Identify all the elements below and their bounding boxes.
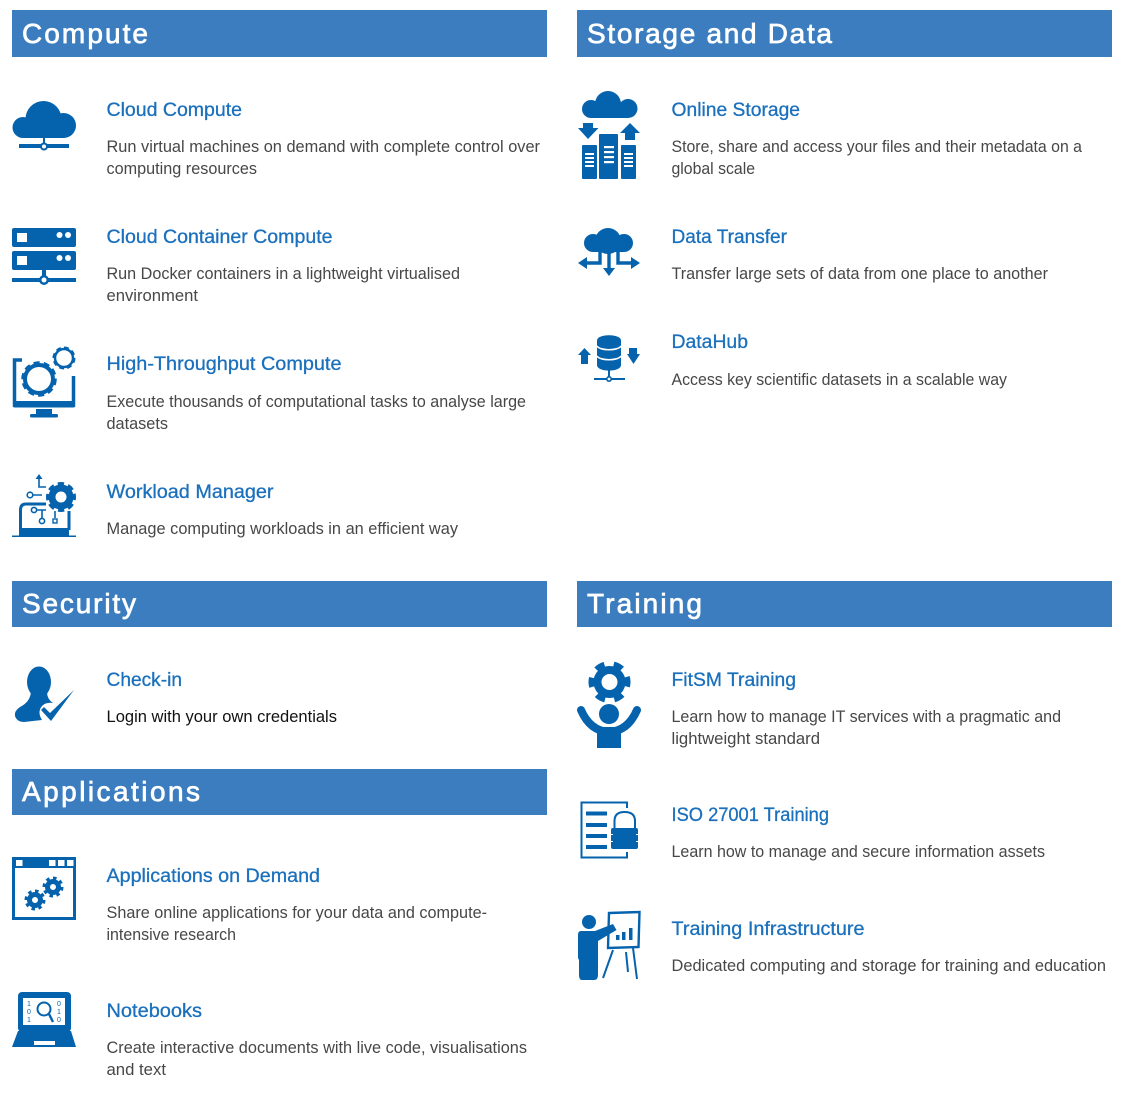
icon: document with padlock [582, 802, 638, 858]
description: Login with your own credentials [106, 708, 337, 726]
description [106, 265, 460, 305]
heading: applications [12, 769, 547, 815]
heading: storage and data: Storage and Data [587, 18, 832, 49]
description: Share online applications for your data and compute- [106, 904, 487, 922]
icon: laptop with magnifier and binary: 1 [27, 1017, 31, 1024]
heading: training: Training [587, 588, 702, 619]
title: Online Storage [672, 99, 800, 121]
description [672, 708, 1061, 748]
description: Create interactive documents with live code, visualisations [106, 1039, 527, 1057]
title: ISO 27001 Training [672, 804, 829, 826]
item: iso 27001 training [582, 802, 1045, 861]
item: datahub [578, 331, 1008, 389]
icon: person raising gear [581, 660, 637, 748]
item: cloud container compute [12, 226, 460, 305]
title: Workload Manager [106, 481, 274, 503]
title: FitSM Training [672, 669, 796, 691]
heading: compute: Compute [22, 18, 148, 49]
description: Execute thousands of computational tasks to analyse large [106, 393, 526, 411]
icon: database with arrows [578, 335, 640, 382]
title: Applications on Demand [106, 865, 320, 887]
heading: applications: Applications [22, 776, 200, 807]
icon: cloud with network [12, 101, 76, 150]
description: Run virtual machines on demand with complete control over [106, 138, 540, 156]
title: Check-in [106, 669, 182, 691]
title: Notebooks [106, 1000, 202, 1022]
item: online storage [578, 91, 1083, 179]
item: fitsm training [581, 660, 1061, 748]
description: datasets [106, 415, 168, 433]
description: lightweight standard [672, 730, 820, 748]
description: environment [106, 287, 198, 305]
description: Run Docker containers in a lightweight virtualised [106, 265, 460, 283]
description [106, 1039, 527, 1079]
item: high-throughput compute [13, 348, 526, 433]
title: High-Throughput Compute [106, 353, 342, 375]
item: cloud compute [12, 99, 540, 178]
description: Learn how to manage and secure information assets [672, 843, 1045, 861]
description: global scale [672, 160, 755, 178]
icon: laptop with magnifier and binary: 0 [27, 1009, 31, 1016]
title: Data Transfer [672, 226, 787, 248]
title: Training Infrastructure [672, 918, 864, 940]
description: Store, share and access your files and their metadata on a [672, 138, 1083, 156]
description: Learn how to manage IT services with a pragmatic and [672, 708, 1061, 726]
title: DataHub [672, 331, 748, 353]
icon: server stack [12, 228, 76, 285]
icon: cloud with servers and arrows [578, 91, 640, 179]
description [106, 138, 540, 178]
heading: storage and data [577, 10, 1112, 57]
description: Transfer large sets of data from one place to another [672, 265, 1048, 283]
description [106, 904, 487, 944]
description: Access key scientific datasets in a scalable way [672, 371, 1008, 389]
description: Manage computing workloads in an efficient way [106, 520, 459, 538]
description: Dedicated computing and storage for training and education [672, 957, 1106, 975]
panel: applications [12, 769, 547, 1079]
item: check-in [15, 666, 337, 726]
icon: laptop with magnifier and binary [12, 992, 76, 1047]
icon: laptop with magnifier and binary: 0 [57, 1001, 61, 1008]
panel: storage and data [577, 10, 1112, 389]
icon: laptop with magnifier and binary: 1 [57, 1009, 61, 1016]
item: applications on demand [12, 857, 487, 944]
item: training infrastructure [578, 912, 1106, 980]
panel: compute [12, 10, 547, 538]
heading: compute [12, 10, 547, 57]
item: data transfer [578, 226, 1048, 283]
title: Cloud Compute [106, 99, 242, 121]
icon: person with check mark [15, 666, 74, 722]
description: computing resources [106, 160, 257, 178]
icon: cloud with three arrows [578, 228, 640, 276]
panel: training [577, 581, 1112, 980]
icon: presenter at board [578, 912, 640, 980]
icon: window with gears [12, 857, 76, 918]
description [672, 138, 1083, 178]
heading: training [577, 581, 1112, 627]
description: intensive research [106, 926, 236, 944]
heading: security: Security [22, 588, 136, 619]
icon: laptop with magnifier and binary: 0 [57, 1017, 61, 1024]
icon: laptop with magnifier and binary: 1 [27, 1001, 31, 1008]
icon: monitor with gears [13, 348, 75, 418]
description: and text [106, 1061, 166, 1079]
icon: laptop with gear and circuit [12, 474, 77, 537]
item: workload manager [12, 474, 459, 538]
description [106, 393, 526, 433]
heading: security [12, 581, 547, 627]
item: notebooks [12, 992, 527, 1079]
title: Cloud Container Compute [106, 226, 332, 248]
panel: security [12, 581, 547, 726]
